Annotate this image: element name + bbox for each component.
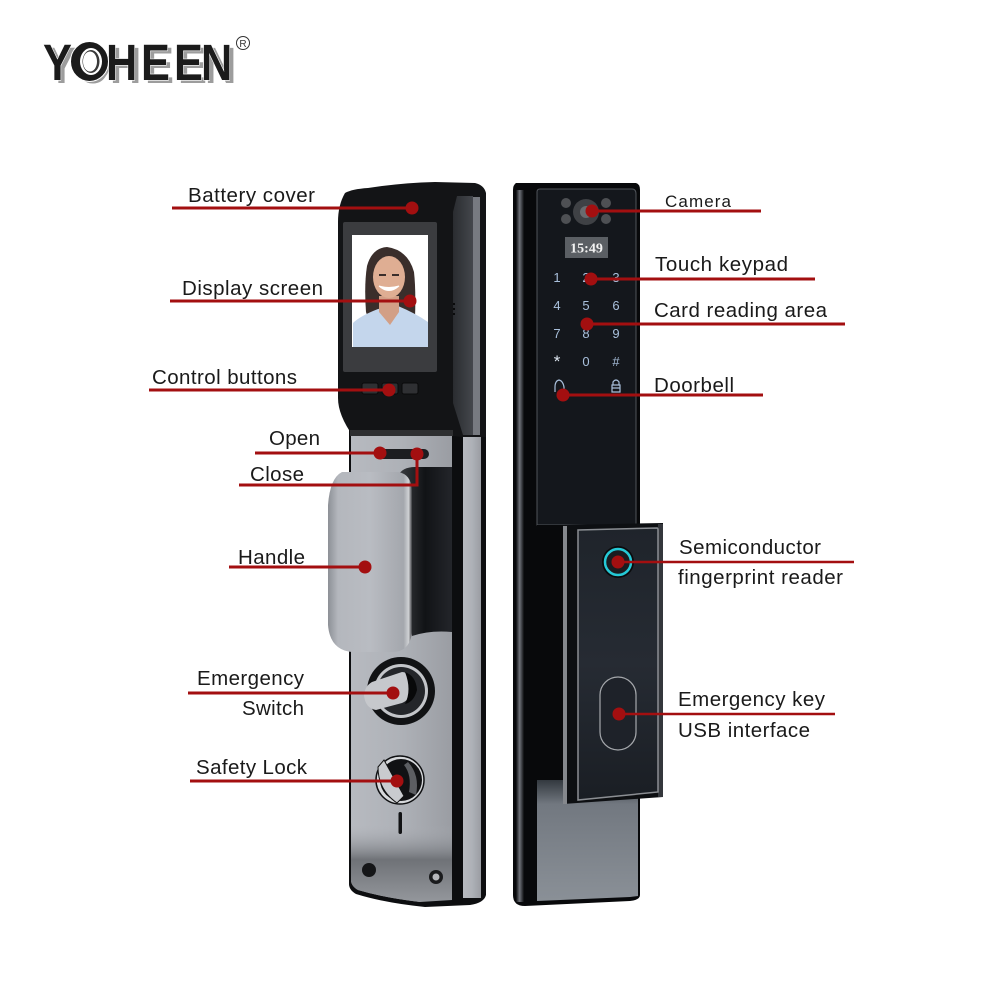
callout: close: Close bbox=[250, 463, 304, 486]
keypad digits: * bbox=[554, 352, 561, 371]
callout: safety lock bbox=[190, 756, 404, 788]
keypad digits: 8 bbox=[582, 326, 590, 341]
callout: card reading area bbox=[580, 299, 845, 330]
callout: emergency switch: Switch bbox=[242, 697, 304, 720]
callout: camera bbox=[586, 192, 761, 218]
fingerprint ring bbox=[602, 546, 634, 578]
callout: emergency switch bbox=[188, 667, 400, 720]
display head bbox=[338, 182, 486, 437]
callout: control buttons bbox=[149, 366, 396, 396]
usb cover oval bbox=[600, 677, 636, 750]
screen bezel bbox=[343, 222, 437, 372]
keypad digits: 0 bbox=[582, 354, 590, 369]
callout: close bbox=[239, 448, 424, 486]
lock icon bbox=[612, 380, 620, 392]
callout: emergency key usb interface: USB interface bbox=[678, 719, 810, 742]
keypad digits: 9 bbox=[612, 326, 620, 341]
callout: control buttons: Control buttons bbox=[152, 366, 297, 389]
callout: handle: Handle bbox=[238, 546, 305, 569]
callout: emergency switch: Emergency bbox=[197, 667, 305, 690]
callout: semiconductor fingerprint reader: fingerprint reader bbox=[678, 566, 843, 589]
logo: YOHEEN: YOHEEN bbox=[43, 35, 232, 92]
callout: doorbell bbox=[556, 374, 763, 402]
callout: display screen: Display screen bbox=[182, 277, 323, 300]
keypad digits: 2 bbox=[582, 270, 590, 285]
time display bbox=[565, 237, 608, 258]
callout: handle bbox=[229, 546, 372, 574]
lower plate bbox=[537, 780, 638, 901]
keypad digits: 7 bbox=[553, 326, 561, 341]
head edge stripe bbox=[473, 197, 480, 435]
logo: YOHEEN: YOHEEN bbox=[47, 38, 236, 95]
safety lock knob bbox=[376, 756, 424, 804]
keypad digits: 5 bbox=[582, 298, 590, 313]
right silver strip bbox=[463, 430, 481, 898]
faceplate bottom band bbox=[351, 825, 452, 902]
head side panel bbox=[453, 196, 473, 435]
keypad digits: 3 bbox=[612, 270, 620, 285]
callout: battery cover bbox=[172, 184, 418, 214]
callout: emergency key usb interface: Emergency key bbox=[678, 688, 826, 711]
display screen with portrait bbox=[352, 235, 428, 347]
time display: 15:49 bbox=[570, 242, 603, 256]
bell icon bbox=[555, 380, 564, 392]
emergency switch knob bbox=[364, 657, 435, 725]
faceplate bbox=[351, 436, 452, 902]
handle shadow bbox=[398, 467, 452, 636]
fingerprint module bbox=[563, 523, 663, 804]
logo: YOHEEN: R bbox=[239, 39, 247, 50]
callout: doorbell: Doorbell bbox=[654, 374, 734, 397]
keypad digits: 6 bbox=[612, 298, 620, 313]
body outer bbox=[349, 425, 486, 907]
callout: safety lock: Safety Lock bbox=[196, 756, 308, 779]
callout: open bbox=[255, 427, 386, 460]
callout: card reading area: Card reading area bbox=[654, 299, 828, 322]
right lock: back view bbox=[513, 183, 663, 906]
callout: touch keypad: Touch keypad bbox=[655, 253, 788, 276]
screws bbox=[362, 863, 376, 877]
keypad panel bbox=[537, 189, 636, 525]
callout: emergency key usb interface bbox=[612, 688, 835, 742]
key slot mark bbox=[398, 812, 402, 834]
callout: touch keypad bbox=[584, 253, 815, 286]
callout: camera: Camera bbox=[665, 192, 732, 211]
handle bbox=[328, 472, 412, 652]
keypad digits: 4 bbox=[553, 298, 561, 313]
left lock: front view bbox=[328, 182, 486, 907]
top strip of faceplate bbox=[350, 430, 453, 436]
keypad digits: # bbox=[612, 354, 620, 369]
callout: semiconductor fingerprint reader bbox=[612, 536, 854, 589]
keypad digits bbox=[553, 270, 620, 371]
body bbox=[513, 183, 640, 906]
callout: semiconductor fingerprint reader: Semiconductor bbox=[679, 536, 821, 559]
control button icons bbox=[362, 383, 418, 394]
callout: battery cover: Battery cover bbox=[188, 184, 315, 207]
callout: display screen bbox=[170, 277, 416, 308]
keypad digits: 1 bbox=[553, 270, 561, 285]
callout: open: Open bbox=[269, 427, 320, 450]
camera cluster bbox=[561, 198, 611, 225]
open close slot bbox=[375, 449, 429, 459]
